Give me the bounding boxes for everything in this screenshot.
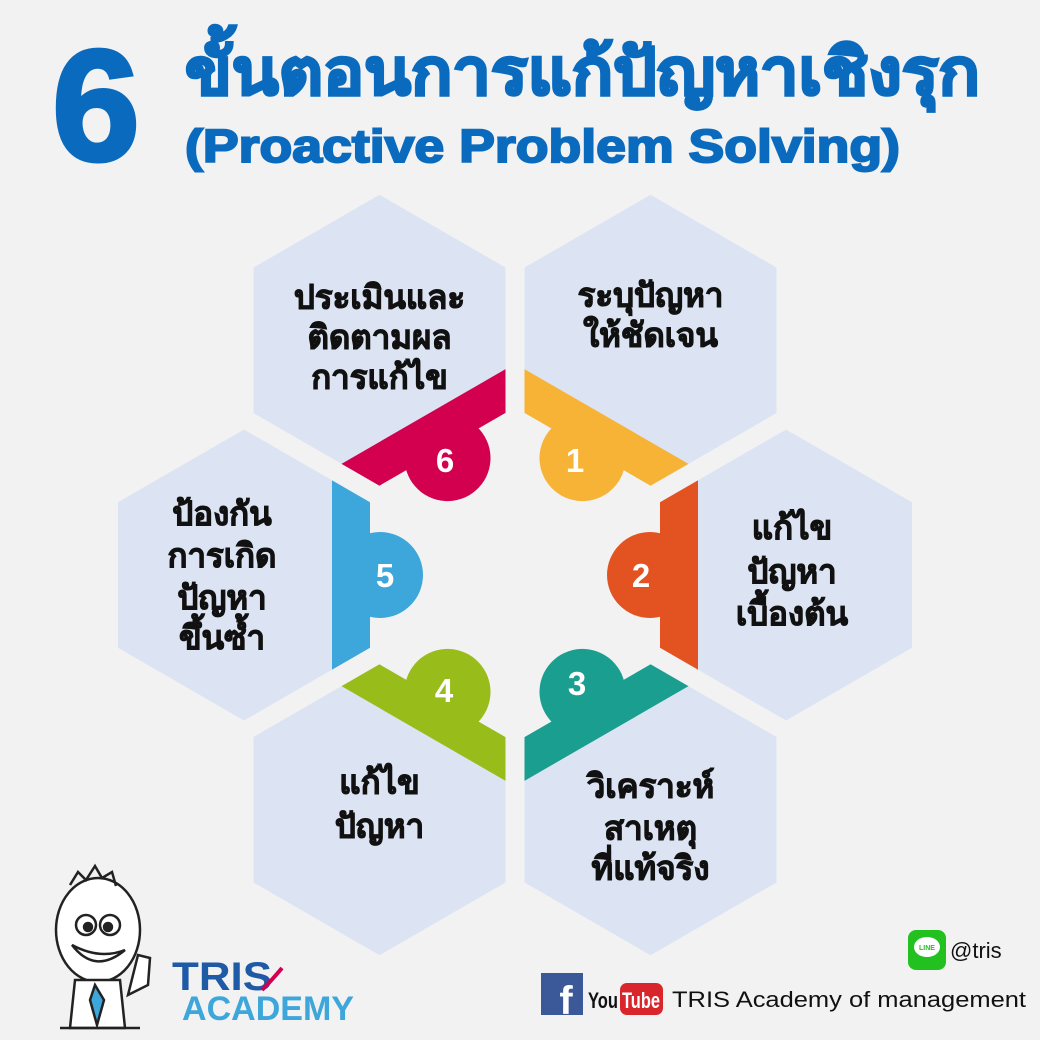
step numbers: 1 [566, 442, 584, 479]
title: thai heading: ขั้นตอนการแก้ปัญหาเชิงรุก [185, 25, 980, 112]
hexagon 5: ปัญหา [177, 579, 267, 617]
hexagon 3 [524, 648, 776, 955]
hexagon 4 [254, 648, 506, 955]
hexagon 6: ประเมินและ [294, 278, 465, 315]
social: facebook youtube [541, 973, 1026, 1023]
logo: TRIS ACADEMY [172, 955, 354, 1028]
logo: TRIS ACADEMY: ACADEMY [182, 990, 354, 1028]
hexagon 3: วิเคราะห์ [586, 768, 714, 805]
hexagon 6: ติดตามผล [307, 318, 452, 355]
hexagon 1: ระบุปัญหา [578, 276, 723, 316]
hexagon 2: แก้ไข [752, 508, 832, 546]
social: facebook youtube: You [588, 988, 618, 1013]
step numbers: 6 [436, 442, 454, 479]
logo: TRIS ACADEMY: TRIS [172, 955, 272, 999]
hexagon 4: ปัญหา [335, 808, 424, 846]
LINE icon and handle: LINE [919, 945, 935, 952]
step numbers: 2 [632, 557, 650, 594]
social: facebook youtube: f [559, 979, 573, 1023]
hexagon 1 [524, 195, 776, 502]
hexagon 4: แก้ไข [339, 763, 420, 801]
title: big number 6: 6 [52, 18, 140, 194]
hexagon 3: สาเหตุ [604, 810, 697, 850]
hexagon 2: ปัญหา [747, 553, 837, 591]
step numbers: 5 [376, 557, 394, 594]
LINE icon and handle: @tris [950, 938, 1002, 963]
hexagon 5: ป้องกัน [172, 495, 272, 532]
title: english subtitle: (Proactive Problem Solving) [185, 120, 900, 172]
hexagon 5 [118, 415, 423, 735]
hexagon 5: ขึ้นซ้ำ [179, 613, 265, 656]
social: facebook youtube: TRIS Academy of management [672, 987, 1026, 1012]
hexagon 3: ที่แท้จริง [592, 845, 709, 887]
hexagon 2 [607, 415, 912, 735]
LINE icon and handle [908, 930, 1002, 970]
step numbers [376, 442, 650, 709]
step numbers: 3 [568, 665, 586, 702]
hexagon 6 [254, 195, 506, 502]
hexagon 1: ให้ชัดเจน [583, 315, 718, 353]
hexagon 6: การแก้ไข [311, 357, 448, 395]
step numbers: 4 [435, 672, 454, 709]
hexagon 2: เบื้องต้น [736, 589, 849, 632]
social: facebook youtube: Tube [622, 988, 660, 1013]
hexagon 5: การเกิด [168, 537, 276, 574]
mascot character [56, 866, 150, 1028]
